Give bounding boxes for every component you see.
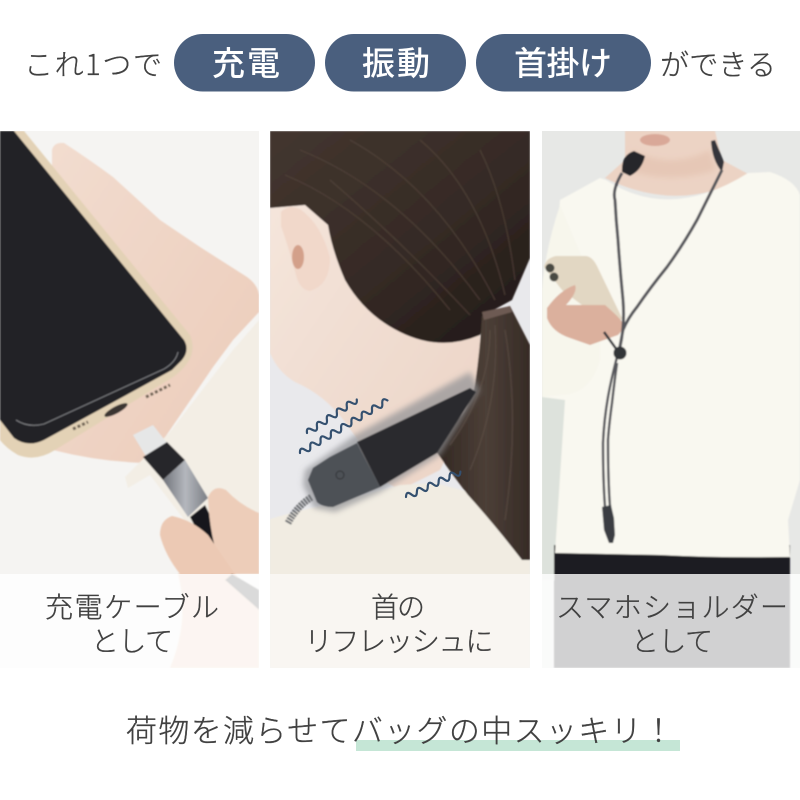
ear inner: [292, 245, 304, 269]
chin shadow: [628, 150, 716, 178]
ponytail strands: [450, 325, 512, 520]
caption band: [0, 574, 259, 668]
panel 1 background: [0, 131, 259, 574]
hand on phone: [547, 285, 623, 345]
device cable: [288, 497, 312, 523]
connector black part: [143, 442, 185, 480]
strap loop: [614, 170, 722, 357]
wave 3: [405, 469, 462, 500]
panel: charging cable: [0, 131, 259, 668]
upper finger: [208, 488, 259, 574]
caption: スマホショルダーとして: として: [631, 620, 713, 660]
hand: [52, 143, 259, 463]
pill: 振動: [325, 34, 466, 92]
hair tie: [482, 306, 512, 320]
green-tinted lower background: [542, 380, 582, 580]
sweater: [542, 172, 800, 557]
highlight underline: [356, 740, 680, 751]
device body: [357, 388, 476, 487]
panel 2 background: [270, 131, 530, 562]
heading trailing text: ができる: [660, 42, 776, 84]
sleeve: [126, 322, 258, 524]
bottom message: [126, 706, 680, 751]
phone camera 1: [546, 264, 554, 272]
pill: 充電: [174, 34, 315, 92]
ponytail: [432, 306, 530, 560]
panel 3 background: [542, 131, 800, 668]
caption: 充電ケーブルとして: として: [91, 620, 173, 660]
phone port: [104, 402, 128, 418]
strap lower: [603, 357, 617, 507]
pants: [554, 545, 790, 668]
phone camera 2: [550, 272, 558, 282]
photo: neck and hair: [270, 131, 530, 574]
caption band: [270, 574, 530, 668]
cable under caption: [225, 574, 259, 610]
screen edge highlight: [16, 352, 178, 425]
neck and chin: [605, 131, 750, 196]
neck pad right: [711, 140, 724, 172]
wave 1: [305, 397, 358, 435]
phone: [544, 256, 622, 325]
power button: [336, 471, 344, 479]
caption: 充電ケーブルとして: 充電ケーブル: [45, 586, 219, 626]
panel: smartphone shoulder strap: [542, 131, 800, 668]
device motion blur: [303, 372, 480, 512]
caption: 充電ケーブルとして: [46, 592, 218, 653]
strap slider: [614, 346, 626, 360]
caption: スマホショルダーとして: [556, 586, 788, 660]
device tip: [308, 443, 380, 507]
photo: woman wearing strap: [542, 131, 800, 668]
pill: 振動: 振動: [362, 37, 430, 85]
connector tip: [133, 425, 166, 456]
panel: neck refresh: [270, 131, 530, 668]
caption band: [542, 574, 800, 668]
cable: [189, 504, 215, 544]
photo: hand holding phone and cable: [0, 131, 259, 668]
speaker holes right: [146, 385, 170, 397]
strap end connector: [602, 505, 615, 543]
caption: 首のリフレッシュに: 首の: [371, 586, 425, 626]
neck pad left: [622, 151, 645, 176]
pill: 首掛け: [476, 34, 651, 92]
speaker holes left: [73, 422, 88, 429]
caption: 首のリフレッシュに: リフレッシュに: [304, 620, 494, 660]
hair: [270, 131, 530, 343]
pill: 充電: 充電: [212, 37, 280, 85]
skin under caption: [170, 574, 259, 668]
strap to phone: [604, 332, 617, 350]
neck and face skin: [270, 180, 480, 490]
thumb: [160, 516, 226, 574]
ear: [281, 207, 330, 291]
sweater: [270, 484, 530, 574]
phone frame: [0, 131, 193, 458]
left sleeve: [542, 205, 600, 397]
connector silver part: [163, 460, 208, 517]
caption: スマホショルダーとして: スマホショルダー: [556, 586, 788, 626]
heading: これ1つで 充電 振動 首掛け ができる: [24, 34, 776, 92]
lips: [640, 134, 670, 146]
vibration waves: [298, 397, 462, 500]
message text: 荷物を減らせてバッグの中スッキリ！: [126, 706, 674, 751]
pill: 首掛け: 首掛け: [514, 37, 612, 85]
caption: 首のリフレッシュに: [304, 586, 494, 660]
heading lead text: これ1つで: [24, 42, 162, 84]
hair strands: [285, 140, 515, 315]
phone screen: [0, 131, 187, 444]
wave 2: [298, 398, 389, 456]
